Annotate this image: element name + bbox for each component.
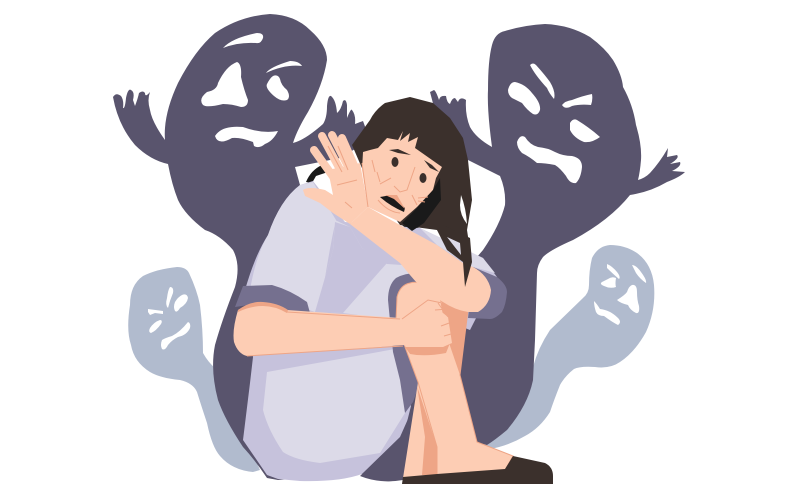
back leg bbox=[403, 382, 437, 478]
knee and front leg bbox=[396, 282, 513, 477]
eyes bbox=[392, 157, 426, 183]
woman bbox=[234, 97, 553, 484]
nose and wrinkles bbox=[372, 160, 428, 205]
face bbox=[362, 131, 442, 231]
shirt bbox=[243, 181, 497, 481]
mouth bbox=[380, 195, 405, 212]
small pale ghost: right bbox=[470, 245, 654, 449]
dark ghost foot behind leg bbox=[360, 398, 420, 481]
raised hand bbox=[303, 135, 368, 224]
small pale ghost: left bbox=[128, 267, 260, 472]
back hair: black bbox=[306, 165, 443, 232]
lower hair strands over arm bbox=[437, 225, 472, 287]
gap in hair bbox=[460, 195, 467, 224]
large dark ghost: right bbox=[420, 24, 685, 445]
hair bbox=[352, 97, 472, 250]
raised forearm bbox=[350, 207, 491, 312]
upper arm and clasped hand bbox=[234, 300, 452, 356]
sleeve and trouser trim bbox=[235, 267, 507, 413]
eyebrows bbox=[389, 149, 439, 172]
shoe bbox=[402, 456, 553, 484]
large dark ghost: left bbox=[113, 14, 470, 481]
